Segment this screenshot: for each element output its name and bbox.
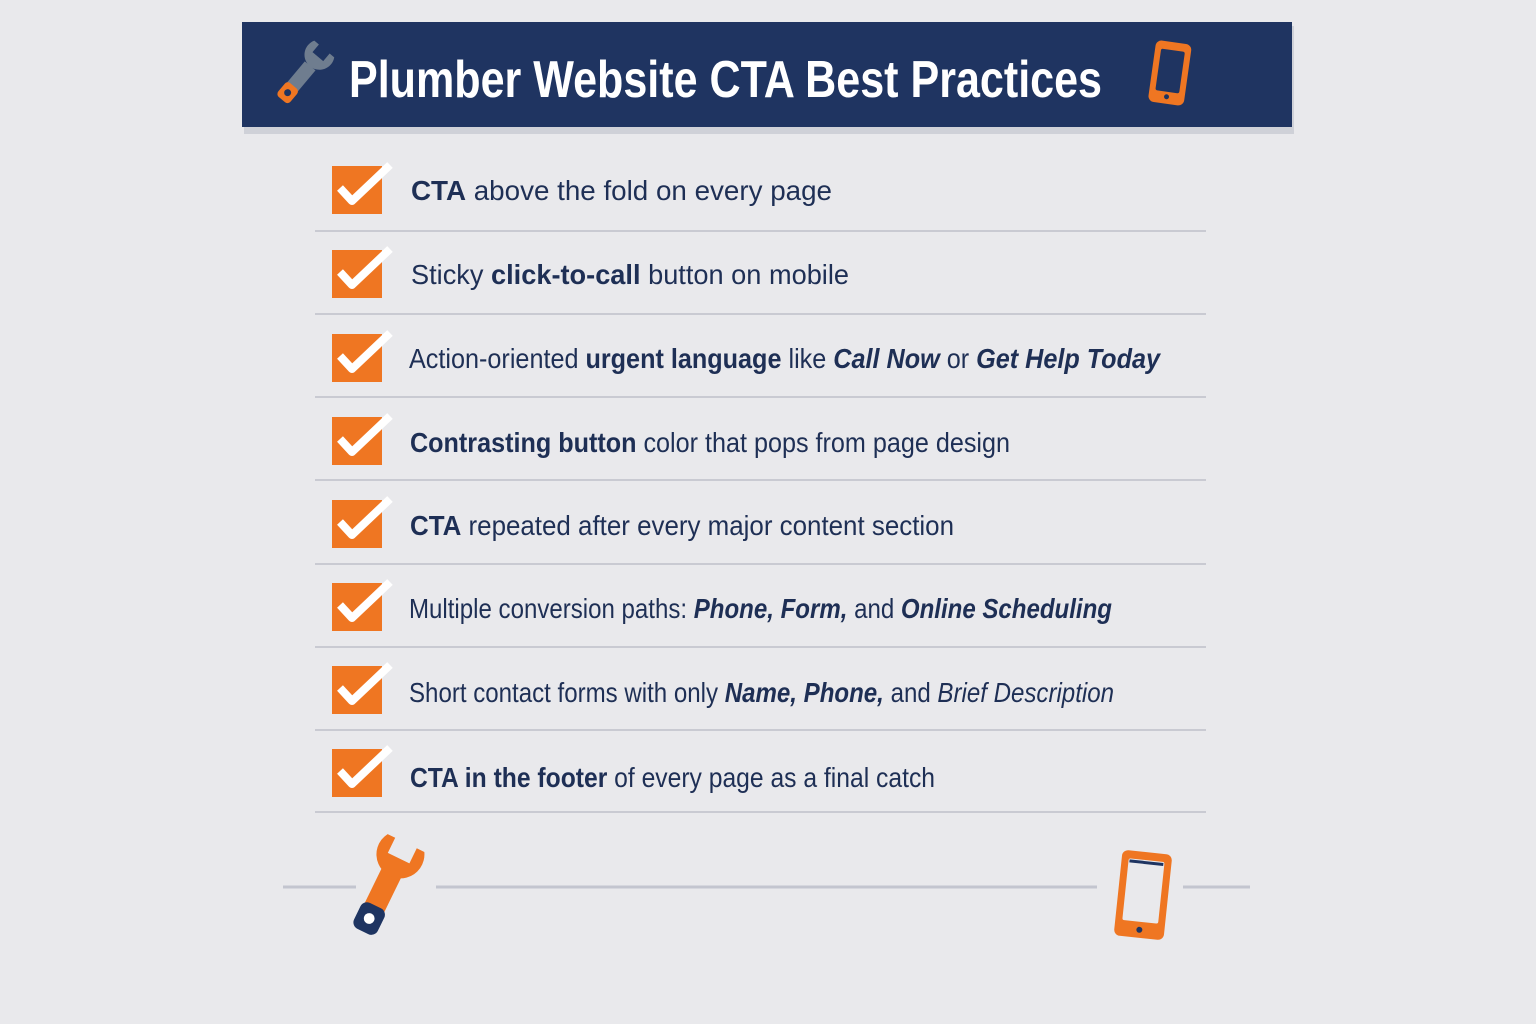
item texts: CTA in the footer of every page as a final catch bbox=[410, 762, 935, 793]
icon: header phone bbox=[1148, 40, 1192, 106]
item texts: Short contact forms with only Name, Phone, and Brief Description bbox=[409, 677, 1114, 708]
item texts bbox=[409, 175, 1161, 793]
item texts: Action-oriented urgent language like Call Now or Get Help Today bbox=[409, 343, 1161, 374]
checkboxes bbox=[332, 165, 390, 797]
item texts: Multiple conversion paths: Phone, Form, and Online Scheduling bbox=[409, 593, 1112, 624]
item texts: Contrasting button color that pops from page design bbox=[410, 427, 1010, 458]
title: Plumber Website CTA Best Practices bbox=[349, 51, 1102, 109]
checklist bbox=[315, 165, 1206, 812]
item texts: CTA above the fold on every page bbox=[411, 175, 832, 206]
item texts: CTA repeated after every major content section bbox=[410, 510, 954, 541]
icon: footer wrench bbox=[341, 832, 428, 942]
icon: header wrench bbox=[270, 39, 336, 109]
item texts: Sticky click-to-call button on mobile bbox=[411, 259, 849, 290]
footer divider with icons bbox=[283, 832, 1250, 942]
header banner bbox=[242, 22, 1294, 134]
icon: footer phone bbox=[1114, 850, 1172, 940]
